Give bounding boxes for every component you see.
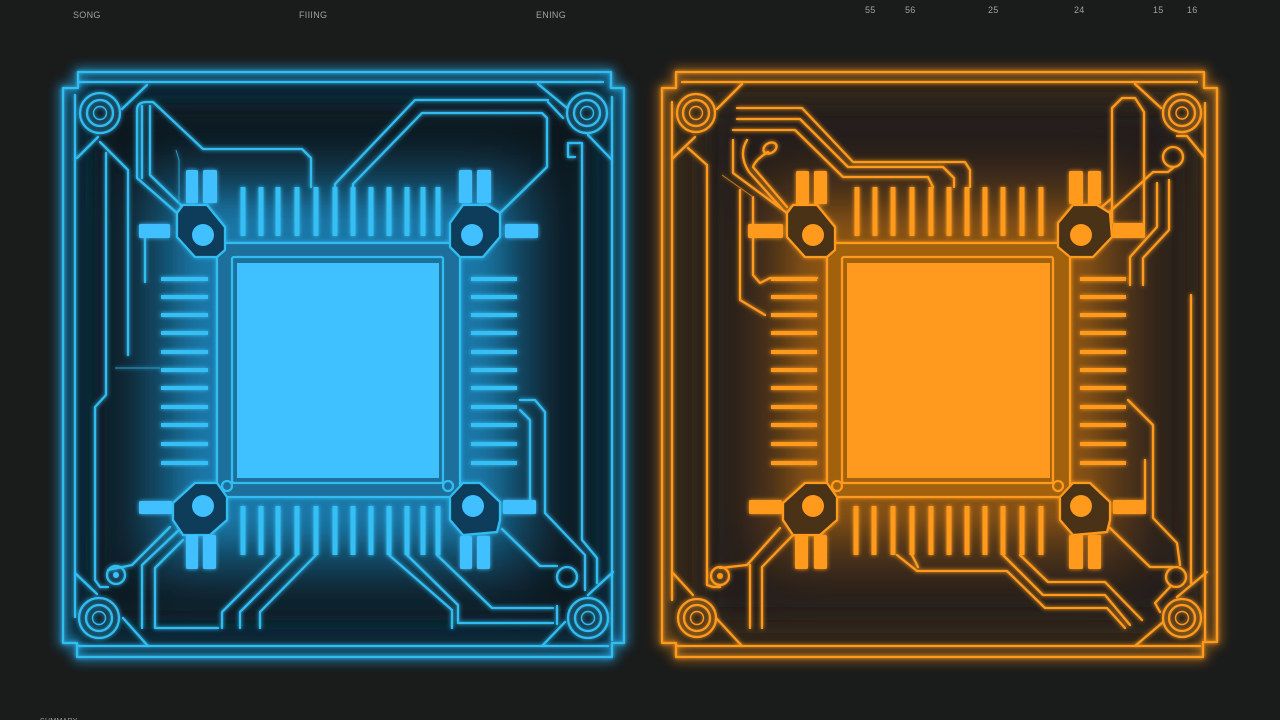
blue circuit line work <box>63 72 624 657</box>
orange node centres and pads <box>748 171 1146 569</box>
blue corner nodes <box>173 205 500 535</box>
orange corner diagonals <box>672 84 1207 646</box>
orange corner mounting rings <box>677 94 1201 637</box>
orange bottom-right traces <box>897 400 1180 628</box>
blue right-side traces <box>520 400 585 590</box>
blue bottom-left traces <box>108 527 316 628</box>
blue top and bottom pins <box>243 187 438 555</box>
orange outer and chip glow <box>662 72 1217 657</box>
blue left and right pins <box>161 279 517 463</box>
top-left header labels: ENING <box>536 10 566 20</box>
orange circuit line work <box>662 72 1217 657</box>
blue top-right traces <box>335 100 597 583</box>
top-right header numbers <box>865 5 1198 15</box>
orange top-left bus traces <box>733 108 970 187</box>
blue corner mounting rings <box>79 93 608 638</box>
orange top and bottom pins <box>856 187 1041 555</box>
orange left and right pins <box>771 279 1126 463</box>
blue chip die <box>237 263 439 478</box>
blue node centres and pads <box>139 170 538 569</box>
top-right header numbers: 24 <box>1074 5 1085 15</box>
panel: orange chip <box>662 72 1217 657</box>
top-left header labels <box>73 10 566 20</box>
blue bottom-right traces <box>389 529 557 628</box>
orange stepped frame <box>662 72 1217 657</box>
top-right header numbers: 16 <box>1187 5 1198 15</box>
top-left header labels: SONG <box>73 10 101 20</box>
orange corner nodes <box>783 205 1112 535</box>
orange chip die <box>847 263 1050 478</box>
top-left header labels: FIIING <box>299 10 327 20</box>
orange chip bezel <box>827 243 1070 497</box>
blue chip bezel <box>217 243 460 497</box>
top-right header numbers: 55 <box>865 5 876 15</box>
blue corner diagonals <box>75 84 613 646</box>
top-right header numbers: 25 <box>988 5 999 15</box>
orange bottom-left traces <box>720 528 793 628</box>
blue top-left traces <box>95 102 311 587</box>
top-right header numbers: 56 <box>905 5 916 15</box>
blue stepped frame <box>63 72 624 657</box>
panel: blue chip <box>63 72 624 657</box>
blue outer and chip glow <box>63 72 624 657</box>
top-right header numbers: 15 <box>1153 5 1164 15</box>
orange top-right pill and traces <box>1087 98 1173 285</box>
orange top-left curls and left traces <box>688 140 817 587</box>
